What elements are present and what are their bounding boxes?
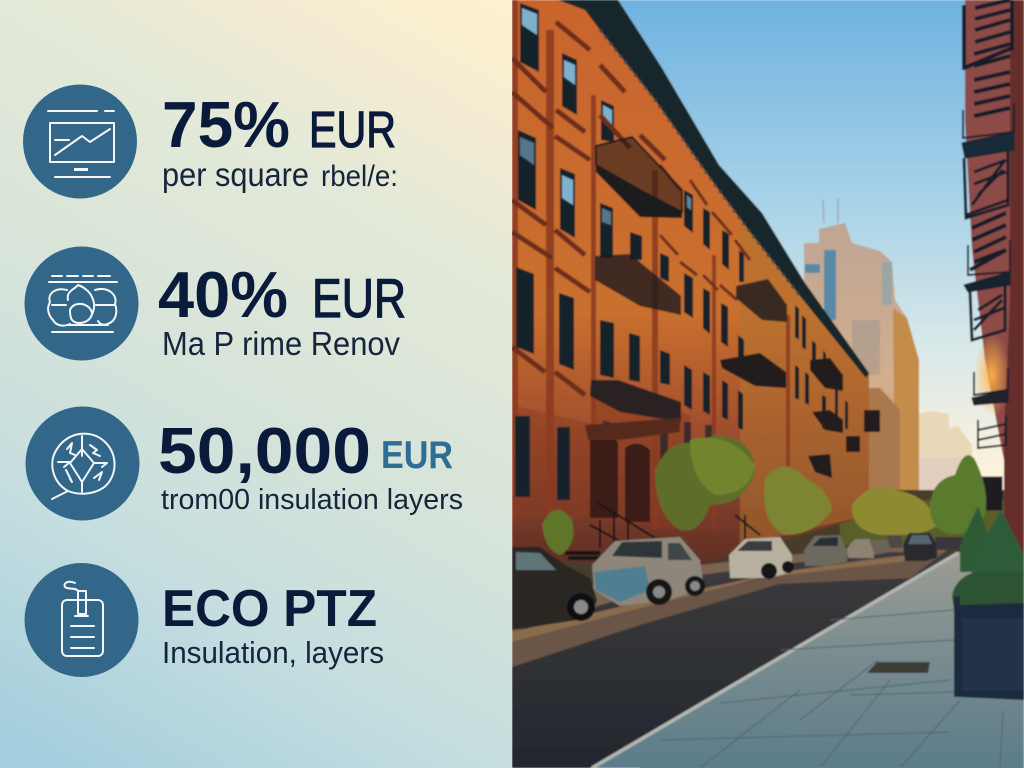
heading: 50,000 EUR: 50,000 bbox=[158, 414, 371, 487]
facade shaded pilasters bbox=[512, 0, 790, 530]
balcony one bbox=[596, 165, 682, 218]
window glass reflections bbox=[520, 8, 691, 225]
heading: 75% EUR bbox=[162, 88, 396, 161]
panel: figures on gradient background bbox=[0, 0, 512, 768]
left building facade bbox=[512, 0, 869, 565]
balconies bbox=[590, 137, 880, 478]
photo: sunlit city street with brick townhouses bbox=[512, 0, 1024, 768]
cornice bbox=[558, 0, 869, 378]
car oncoming bbox=[903, 533, 937, 561]
car silver hatchback bbox=[729, 537, 794, 579]
far foliage behind parked cars bbox=[840, 500, 1005, 545]
car far two bbox=[869, 540, 890, 555]
sky bbox=[512, 0, 1024, 560]
car mid bbox=[804, 535, 847, 566]
small balconies bbox=[720, 353, 880, 478]
heading: 50,000 EUR bbox=[158, 414, 453, 487]
street trees bbox=[542, 435, 986, 555]
heading: 40% EUR: EUR bbox=[312, 267, 406, 329]
heading: 50,000 EUR: EUR bbox=[381, 434, 453, 477]
fire escape bbox=[962, 0, 1014, 510]
car far one bbox=[847, 539, 874, 558]
road bbox=[512, 552, 958, 768]
windows bbox=[515, 3, 848, 500]
manhole cover bbox=[867, 662, 930, 673]
planter box bbox=[954, 596, 1024, 700]
hedge bbox=[952, 572, 1024, 610]
heading: 40% EUR bbox=[158, 258, 406, 331]
cone shrubs bbox=[960, 506, 1024, 582]
car far three bbox=[887, 535, 902, 548]
balcony three bbox=[736, 279, 787, 322]
stat: ECO PTZ insulation layers bbox=[24, 563, 384, 677]
stat: 40% EUR Ma Prime Renov bbox=[24, 246, 406, 362]
icon: speech bubble with diamond bbox=[26, 406, 140, 520]
text: Insulation, layers: Insulation, layers bbox=[162, 635, 384, 670]
cars in distance bbox=[935, 537, 965, 550]
building side pavement bbox=[512, 545, 950, 640]
distant skyline bbox=[917, 411, 975, 490]
cars bbox=[512, 533, 965, 630]
heading: 75% EUR: EUR bbox=[309, 101, 396, 158]
entry doors bbox=[585, 418, 680, 522]
car silver suv bbox=[592, 537, 705, 606]
icon: monitor with rising chart bbox=[23, 84, 137, 198]
curb bbox=[592, 553, 958, 768]
stoop railings bbox=[565, 503, 760, 558]
sidewalk bbox=[590, 552, 1024, 768]
heading: 75% EUR: 75% bbox=[162, 88, 290, 161]
ground backdrop behind street bbox=[512, 490, 1024, 768]
balcony one rail bbox=[596, 137, 682, 212]
stat: 50,000 EUR insulation layers bbox=[26, 406, 463, 520]
heading: ECO PTZ: ECO PTZ bbox=[162, 580, 377, 638]
window pediments and ledges bbox=[512, 22, 750, 395]
icon: clipboard with tag bbox=[24, 563, 138, 677]
text: Ma P rime Renov: Ma P rime Renov bbox=[162, 325, 400, 362]
car dark foreground bbox=[512, 547, 597, 630]
balcony two bbox=[595, 254, 681, 315]
stat: 75% EUR per square metre bbox=[23, 84, 398, 198]
text: per square: rbel/e: bbox=[321, 160, 398, 193]
paving joints bbox=[640, 610, 1024, 768]
facade far golden section bbox=[740, 200, 869, 545]
text: per square: per square bbox=[162, 156, 309, 193]
tower behind the street bbox=[804, 198, 919, 490]
right building wall bbox=[965, 0, 1024, 560]
mid building bbox=[860, 388, 900, 490]
text: trom00 insulation layers: trom00 insulation layers bbox=[161, 484, 463, 516]
icon: insulation layers bbox=[24, 246, 138, 360]
balcony four bbox=[590, 380, 681, 422]
heading: 40% EUR: 40% bbox=[158, 258, 288, 331]
